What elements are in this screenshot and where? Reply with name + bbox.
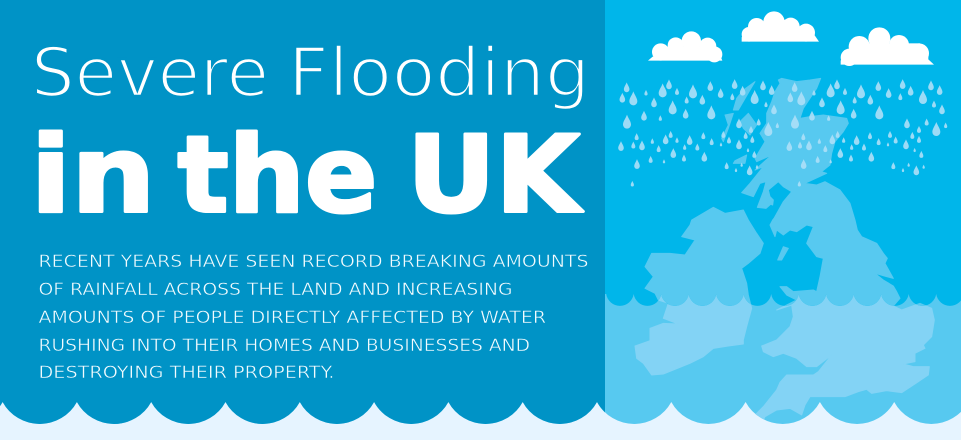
map of UK and Ireland submerged in water	[634, 294, 935, 420]
title: in the UK	[30, 114, 584, 236]
intro paragraph: DESTROYING THEIR PROPERTY.	[38, 363, 334, 382]
title: in the UK: the	[178, 114, 378, 236]
icon: right cloud	[841, 27, 934, 66]
map of UK and Ireland above water	[644, 78, 926, 306]
intro paragraph: RECENT YEARS HAVE SEEN RECORD BREAKING AMOUNTS	[38, 252, 588, 271]
title: Severe Flooding: Severe	[31, 34, 269, 113]
title: in the UK: UK	[407, 114, 584, 236]
icon: middle cloud	[742, 11, 819, 42]
intro paragraph: OF RAINFALL ACROSS THE LAND AND INCREASING	[38, 280, 512, 299]
title: Severe Flooding: Flooding	[288, 34, 590, 113]
raindrops	[618, 79, 947, 186]
intro paragraph: RUSHING INTO THEIR HOMES AND BUSINESSES AND	[38, 336, 530, 355]
panel: intro	[0, 0, 605, 424]
sky with scalloped water line	[605, 0, 961, 306]
icon: left cloud	[648, 31, 722, 62]
title: in the UK: in	[30, 114, 156, 236]
title: Severe Flooding	[31, 34, 590, 113]
dark blue panel with scalloped edge	[0, 0, 605, 424]
intro paragraph: AMOUNTS OF PEOPLE DIRECTLY AFFECTED BY WATER	[38, 308, 546, 327]
intro paragraph	[38, 252, 588, 382]
